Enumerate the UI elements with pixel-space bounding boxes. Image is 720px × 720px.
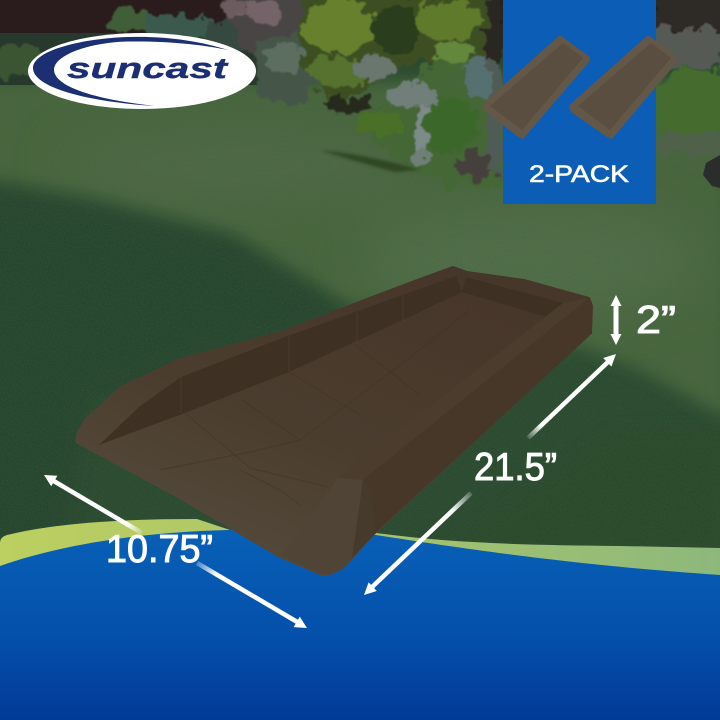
tray silhouette [76, 267, 592, 574]
product: large brown tray [76, 267, 592, 574]
tray side rail [338, 298, 589, 480]
height label: 2” [636, 299, 676, 342]
shrubs and foliage [0, 0, 720, 190]
sunlit lawn [0, 80, 720, 420]
dimension: length arrow [364, 354, 616, 595]
dark rock [703, 155, 720, 188]
shaded lawn [0, 192, 720, 560]
dimension: height arrow [610, 295, 676, 345]
logo swoosh [33, 37, 228, 106]
lawn grain [0, 85, 720, 555]
logo wordmark: suncast [67, 53, 229, 85]
dimension: width arrow [44, 475, 307, 628]
logo: suncast [28, 33, 256, 109]
wave: lime band [0, 519, 720, 720]
wave: blue footer [0, 530, 720, 720]
shadow under shrubs [320, 150, 420, 172]
tray floor [99, 292, 546, 553]
fence and dark top band [0, 0, 720, 34]
right of blue panel [654, 0, 720, 27]
width label: 10.75” [106, 528, 213, 571]
tray back wall segment lines [181, 296, 403, 413]
mini tray 1 [482, 35, 590, 139]
2-pack label: 2-PACK [529, 161, 629, 188]
tray front ramp [282, 478, 375, 574]
panel: 2-pack badge [482, 0, 678, 204]
tray back wall [99, 276, 462, 445]
mini tray 2 [569, 35, 678, 139]
tray floor cracks [160, 310, 470, 505]
length label: 21.5” [474, 446, 557, 489]
